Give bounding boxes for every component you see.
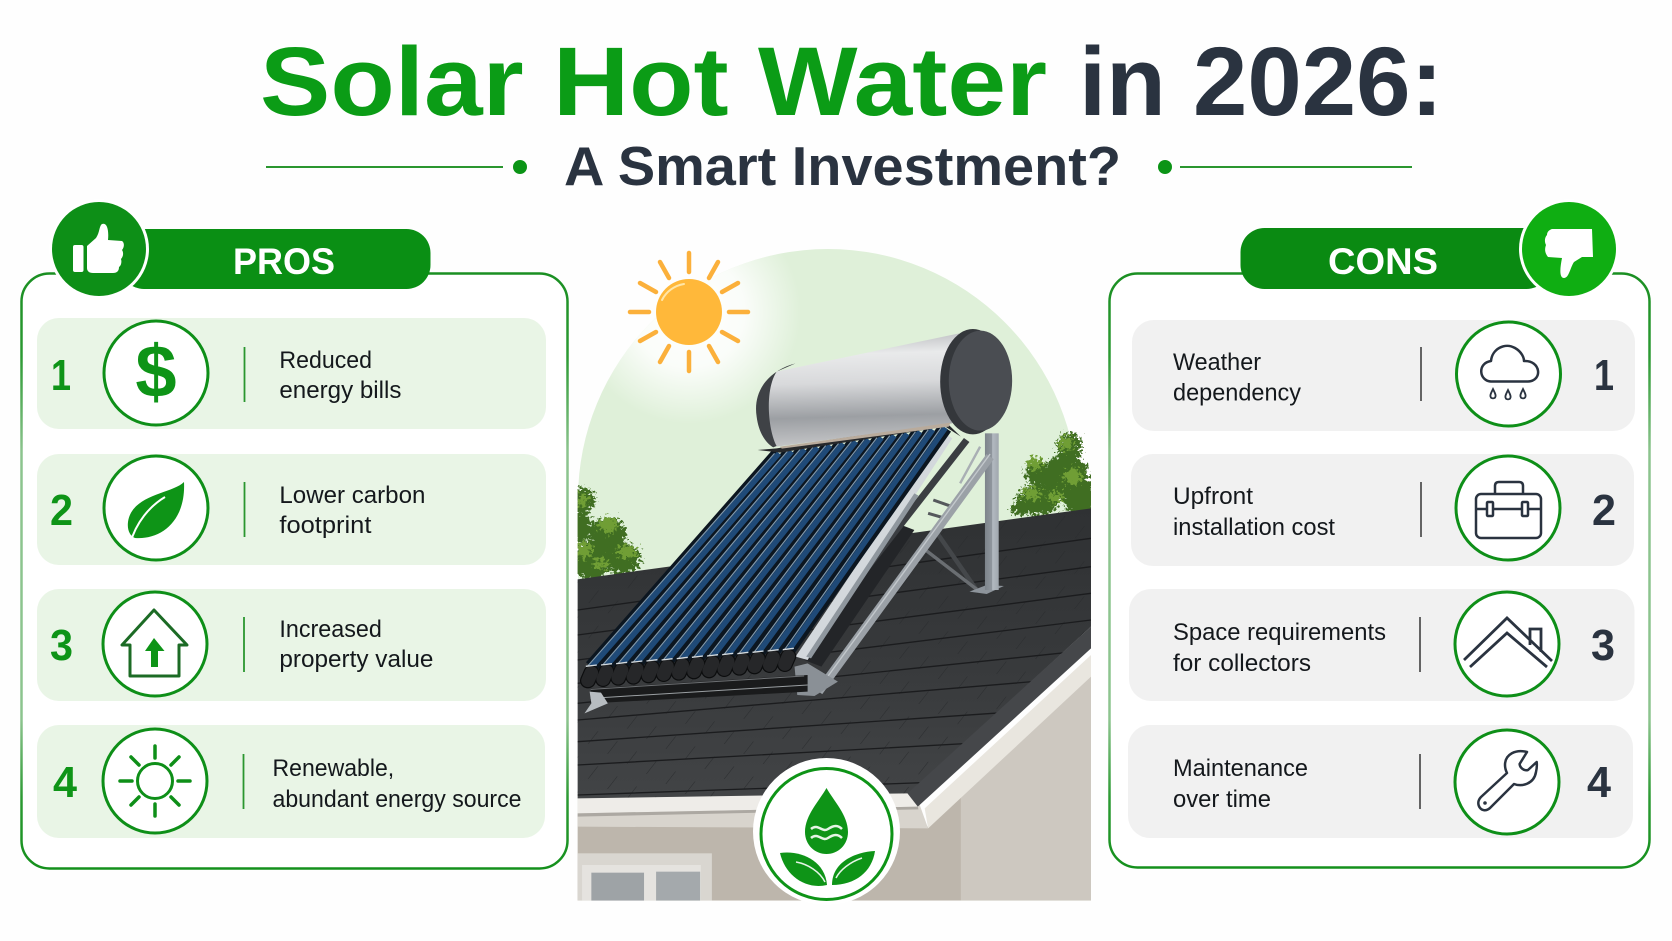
con row 3: space requirements: for collectors [1173, 650, 1311, 677]
cons header pill [1240, 228, 1550, 289]
con row 1: weather dependency: dependency [1173, 380, 1301, 406]
con row 1: weather dependency: 1 [1594, 351, 1614, 400]
pro row 1: reduced energy bills: energy bills [279, 377, 401, 404]
con row 2: upfront installation cost: 2 [1592, 486, 1616, 535]
pro row 3: increased property value [37, 589, 546, 701]
panel: pros [22, 199, 568, 868]
con row 2: upfront installation cost: Upfront [1173, 483, 1253, 510]
con row 3: space requirements: 3 [1591, 621, 1615, 670]
sky arch [578, 249, 1078, 640]
subtitle with side rules [266, 135, 1412, 197]
title: in 2026: [1079, 27, 1443, 136]
pro row 2: lower carbon footprint: 2 [50, 486, 73, 535]
pro row 3: increased property value: property value [279, 646, 433, 673]
icon: sun [630, 253, 748, 371]
con row 4: maintenance over time [1128, 725, 1633, 838]
con row 1: weather dependency: Weather [1173, 349, 1261, 376]
con row 1: weather dependency [1132, 320, 1635, 431]
wall [578, 798, 961, 900]
mounting frame [795, 433, 1004, 696]
subtitle with side rules: A Smart Investment? [564, 135, 1121, 197]
roof [578, 508, 1091, 798]
pro row 1: reduced energy bills: $ [135, 330, 177, 413]
con row 2: upfront installation cost [1131, 454, 1634, 566]
pro row 3: increased property value: 3 [50, 621, 73, 670]
icon badge: water drop and leaves [753, 758, 900, 905]
icon: thumbs down [1519, 199, 1619, 299]
pro row 4: renewable energy source: 4 [53, 758, 78, 807]
pro row 4: renewable energy source: Renewable, [272, 755, 394, 782]
title: Solar Hot Water [260, 27, 1047, 136]
con row 4: maintenance over time: over time [1173, 786, 1271, 813]
con row 3: space requirements: Space requirements [1173, 619, 1386, 646]
panel frame [22, 274, 568, 868]
bottom manifold [584, 648, 808, 713]
pro row 2: lower carbon footprint: Lower carbon [279, 482, 425, 509]
evacuated tubes [587, 428, 946, 667]
con row 4: maintenance over time: 4 [1587, 758, 1612, 807]
pros header pill [120, 229, 430, 289]
pros header pill: PROS [233, 241, 335, 282]
pro row 1: reduced energy bills: 1 [51, 351, 71, 400]
cons header pill: CONS [1328, 241, 1438, 282]
title [260, 27, 1443, 136]
con row 4: maintenance over time: Maintenance [1173, 755, 1308, 782]
soffit [925, 655, 1091, 828]
pro row 2: lower carbon footprint [37, 454, 546, 565]
pro row 4: renewable energy source [37, 725, 545, 838]
pro row 1: reduced energy bills [37, 318, 546, 429]
panel frame [1110, 274, 1650, 868]
pro row 3: increased property value: Increased [279, 616, 382, 643]
water tank [756, 329, 1012, 453]
pro row 1: reduced energy bills: Reduced [279, 347, 372, 374]
house and collector scene [568, 329, 1097, 901]
window [578, 853, 712, 901]
pro row 2: lower carbon footprint: footprint [279, 512, 372, 539]
con row 3: space requirements [1129, 589, 1634, 701]
gutter [578, 790, 928, 828]
con row 2: upfront installation cost: installation cost [1173, 514, 1335, 541]
pro row 4: renewable energy source: abundant energy source [272, 786, 522, 813]
icon: thumbs up [49, 199, 149, 299]
panel: cons [1110, 199, 1650, 868]
fascia [907, 627, 1091, 807]
trees [568, 433, 1097, 580]
central illustration: solar water heater on roof [568, 249, 1097, 905]
